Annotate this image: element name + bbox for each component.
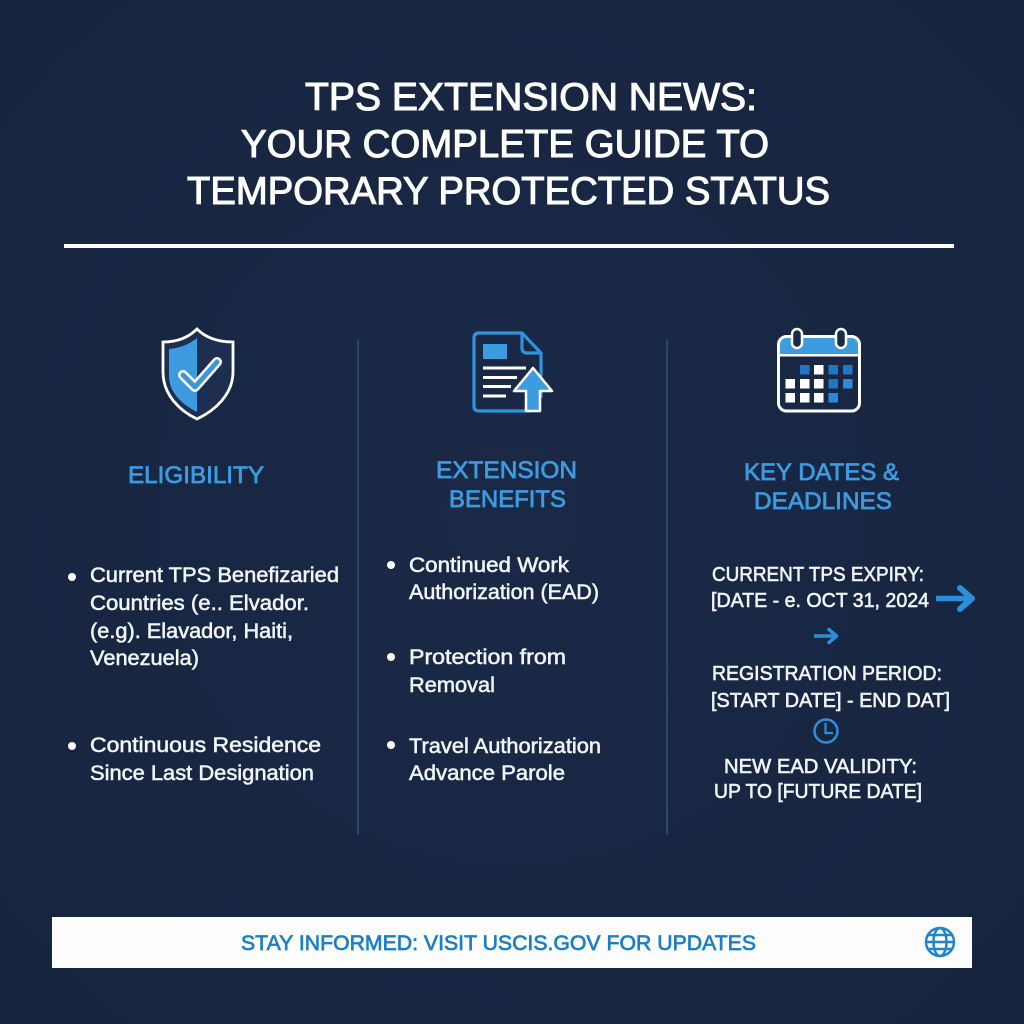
heading: eligibility: ELIGIBILITY <box>128 462 264 489</box>
text: new EAD validity: UP TO [FUTURE DATE] <box>714 780 922 803</box>
heading: key dates and deadlines: DEADLINES <box>754 488 892 515</box>
bullet list: benefits: Advance Parole <box>409 762 565 785</box>
bullet list: benefits <box>387 554 601 785</box>
bullet list: eligibility: Continuous Residence <box>90 734 321 757</box>
icon: clock <box>814 720 838 742</box>
heading: extension benefits: EXTENSION <box>436 457 577 484</box>
bullet list: eligibility: Since Last Designation <box>90 762 314 785</box>
bullet list: benefits: Removal <box>409 674 495 697</box>
icon: shield with check <box>163 329 233 419</box>
text: registration period: REGISTRATION PERIOD: <box>712 662 942 685</box>
panel: extension benefits <box>387 333 601 785</box>
text: new EAD validity: NEW EAD VALIDITY: <box>724 755 917 778</box>
bullet list: eligibility: Countries (e.. Elvador. <box>90 592 309 615</box>
icon: calendar <box>778 329 860 411</box>
title <box>187 76 830 213</box>
title: TEMPORARY PROTECTED STATUS <box>187 170 830 213</box>
heading: extension benefits: BENEFITS <box>449 486 566 513</box>
icon: document with upload arrow <box>474 333 552 411</box>
text: registration period: [START DATE] - END DAT] <box>711 689 950 712</box>
heading: extension benefits <box>436 457 577 513</box>
bullet list: benefits: Protection from <box>409 646 566 669</box>
text: current TPS expiry <box>711 563 929 612</box>
text: current TPS expiry: [DATE - e. OCT 31, 2024 <box>711 589 929 612</box>
text: new EAD validity <box>714 755 922 803</box>
arrow: small right <box>814 630 836 642</box>
footer banner <box>52 917 972 968</box>
text: registration period <box>711 662 950 712</box>
heading: key dates and deadlines <box>744 459 899 515</box>
bullet list: eligibility: (e.g). Elavador, Haiti, <box>90 620 293 643</box>
text: current TPS expiry: CURRENT TPS EXPIRY: <box>712 563 924 586</box>
title: YOUR COMPLETE GUIDE TO <box>241 123 769 166</box>
bullet list: benefits: Continued Work <box>409 554 570 577</box>
icon: globe <box>926 928 954 956</box>
heading: key dates and deadlines: KEY DATES & <box>744 459 899 486</box>
banner text: STAY INFORMED: VISIT USCIS.GOV FOR UPDATES <box>241 931 756 955</box>
bullet list: eligibility: Current TPS Benefizaried <box>90 564 339 587</box>
title: TPS EXTENSION NEWS: <box>305 76 757 119</box>
bullet list: benefits: Authorization (EAD) <box>409 581 599 604</box>
arrow: large right <box>936 588 972 609</box>
bullet list: eligibility <box>68 564 339 785</box>
bullet list: benefits: Travel Authorization <box>409 735 601 758</box>
bullet list: eligibility: Venezuela) <box>90 647 199 670</box>
panel: key dates and deadlines <box>711 329 972 803</box>
panel: eligibility <box>68 329 339 785</box>
